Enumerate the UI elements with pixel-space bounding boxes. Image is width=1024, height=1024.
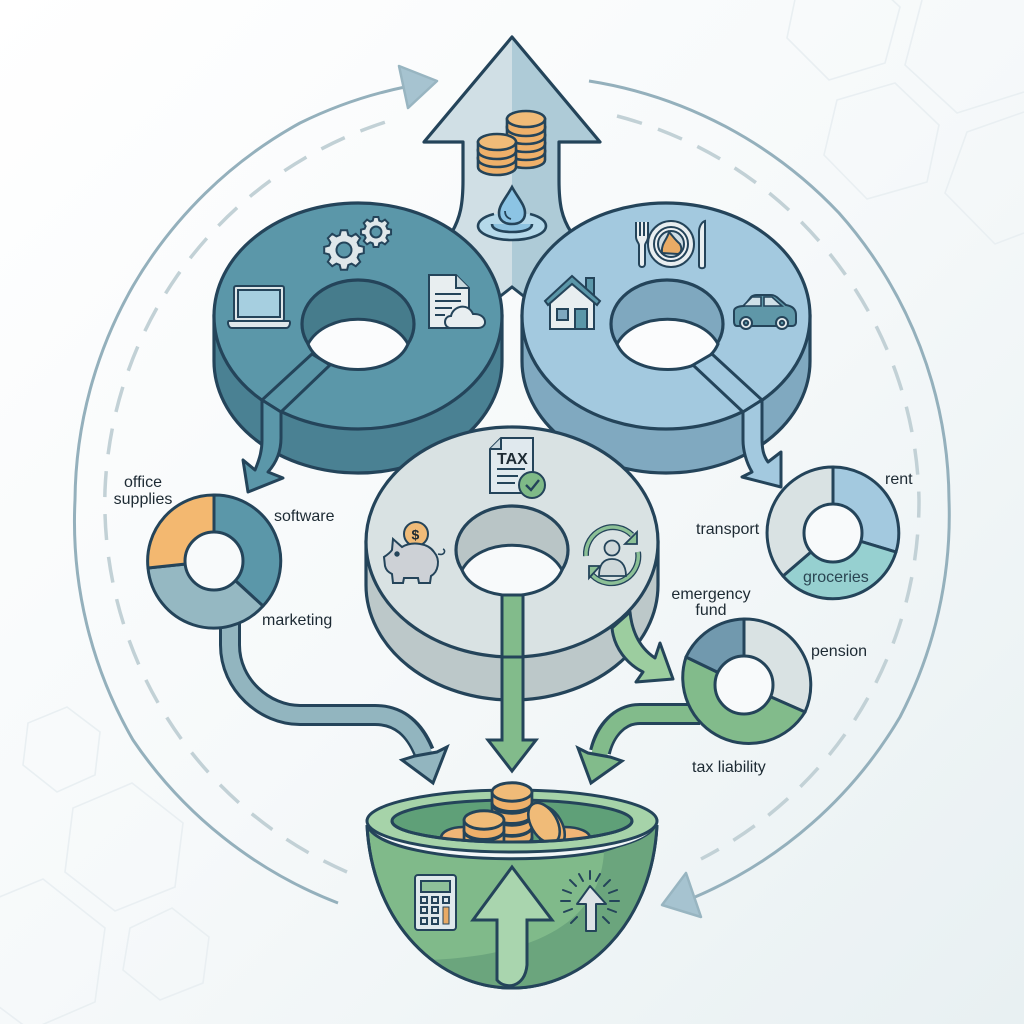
slice: marketing	[148, 561, 263, 628]
icon: car	[734, 295, 796, 329]
icon: calculator	[415, 875, 456, 930]
outer cycle arc left with arrowhead	[74, 66, 437, 903]
ring: business expenses (teal)	[214, 203, 502, 473]
icon: laptop	[228, 286, 290, 328]
label: marketing: marketing	[262, 612, 332, 629]
label: office supplies: office	[124, 474, 162, 491]
label: emergency fund: fund	[695, 602, 727, 619]
flow arrow: business donut to bowl	[230, 620, 447, 783]
arrow in bowl	[473, 867, 552, 986]
slice: office supplies	[148, 495, 214, 568]
slice: software	[214, 495, 281, 606]
icon: coin stacks	[478, 111, 545, 175]
flow arrow: center to bowl	[488, 595, 536, 771]
donut hole	[715, 656, 773, 714]
inner dashed cycle left	[105, 118, 399, 872]
icon: piggy bank with dollar coin	[384, 522, 445, 583]
slice: tax liability	[683, 657, 805, 743]
slice: emergency fund	[686, 619, 744, 685]
bowl rim	[367, 790, 657, 852]
label: tax liability: tax liability	[692, 759, 766, 776]
donut hole	[185, 532, 243, 590]
icon: water drop with ripples	[478, 187, 546, 240]
inner dashed cycle right	[617, 116, 919, 859]
top up arrow	[424, 37, 600, 298]
slice: rent	[833, 467, 899, 552]
flow arrow: savings donut to bowl	[578, 714, 700, 783]
donut chart: personal expenses	[767, 467, 899, 599]
icon: growth arrow with rays	[561, 871, 619, 931]
icon: document and cloud	[429, 275, 485, 328]
label: pension: pension	[811, 643, 867, 660]
slice: groceries	[783, 533, 896, 599]
icon: gears	[324, 217, 391, 270]
label: software: software	[274, 508, 335, 525]
label: transport: transport	[696, 521, 760, 538]
bowl with coins	[367, 783, 657, 988]
label: emergency fund: emergency	[671, 586, 751, 603]
slice: transport	[767, 467, 833, 576]
flow strip and arrow: personal to donut	[693, 354, 781, 487]
donut chart: business expenses	[148, 495, 281, 628]
slice: pension	[744, 619, 811, 712]
icon: person in cycle arrows	[586, 527, 638, 583]
label: office supplies: supplies	[114, 491, 172, 508]
donut hole	[804, 504, 862, 562]
bowl shading	[430, 825, 657, 988]
ring: savings and tax (grey)	[366, 427, 658, 700]
icon: tax document: TAX	[497, 451, 528, 468]
icon: house	[545, 276, 600, 329]
coins in bowl	[440, 781, 591, 840]
icon: fork plate and knife	[636, 221, 705, 268]
outer cycle arc right with arrowhead	[589, 81, 949, 917]
icon: piggy bank with dollar coin: $	[412, 526, 420, 542]
ring: personal expenses (light blue)	[522, 203, 810, 473]
bowl body	[367, 825, 657, 988]
label: groceries: groceries	[803, 569, 869, 586]
label: rent: rent	[885, 471, 913, 488]
flow strip and arrow: business to donut	[243, 354, 330, 492]
flow arrow: center to emergency donut	[612, 612, 673, 682]
donut chart: savings and tax	[683, 619, 811, 743]
icon: tax document	[490, 438, 545, 498]
